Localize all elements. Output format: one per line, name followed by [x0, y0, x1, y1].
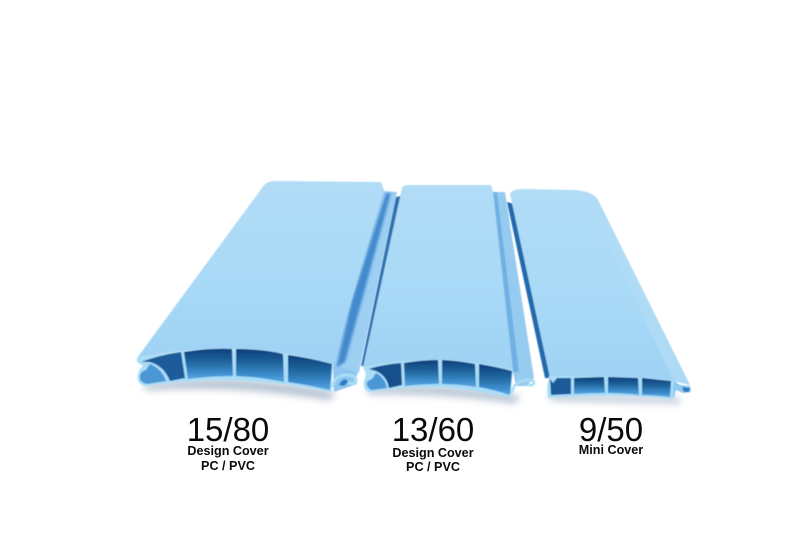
label: 15/80: Design Cover	[187, 444, 269, 458]
label: 15/80	[187, 411, 269, 473]
interlock lip	[670, 380, 691, 398]
front profile	[547, 376, 674, 399]
slat 13/60	[361, 185, 534, 398]
strip shadow	[493, 192, 519, 372]
label: 13/60: Design Cover	[392, 446, 474, 460]
top surface	[363, 185, 513, 370]
label: 9/50: Mini Cover	[579, 443, 643, 457]
top surface	[137, 181, 384, 364]
cells	[574, 377, 605, 394]
side strip	[583, 192, 690, 385]
left hollow	[140, 364, 166, 384]
label: 15/80: 15/80	[187, 411, 269, 448]
floor shadows	[145, 380, 680, 403]
label: 13/60: PC / PVC	[406, 460, 460, 474]
front profile	[363, 360, 513, 398]
cells	[404, 360, 439, 386]
label: 13/60: 13/60	[392, 411, 474, 448]
label: 15/80: PC / PVC	[201, 459, 255, 473]
dark side edge	[507, 202, 552, 378]
label: 9/50: 9/50	[579, 411, 643, 448]
left hollow	[367, 373, 387, 390]
hook	[333, 375, 356, 386]
label: 13/60	[392, 411, 474, 474]
front profile	[137, 350, 333, 392]
slat 15/80	[137, 181, 397, 392]
hook backing	[333, 366, 357, 392]
interlock groove	[333, 191, 397, 382]
groove shadow	[336, 193, 391, 368]
interlock strip	[493, 192, 534, 386]
top surface	[510, 189, 690, 385]
slat 9/50	[507, 189, 691, 399]
dark side edge	[361, 195, 405, 366]
hook	[512, 380, 534, 392]
cells	[184, 349, 233, 379]
